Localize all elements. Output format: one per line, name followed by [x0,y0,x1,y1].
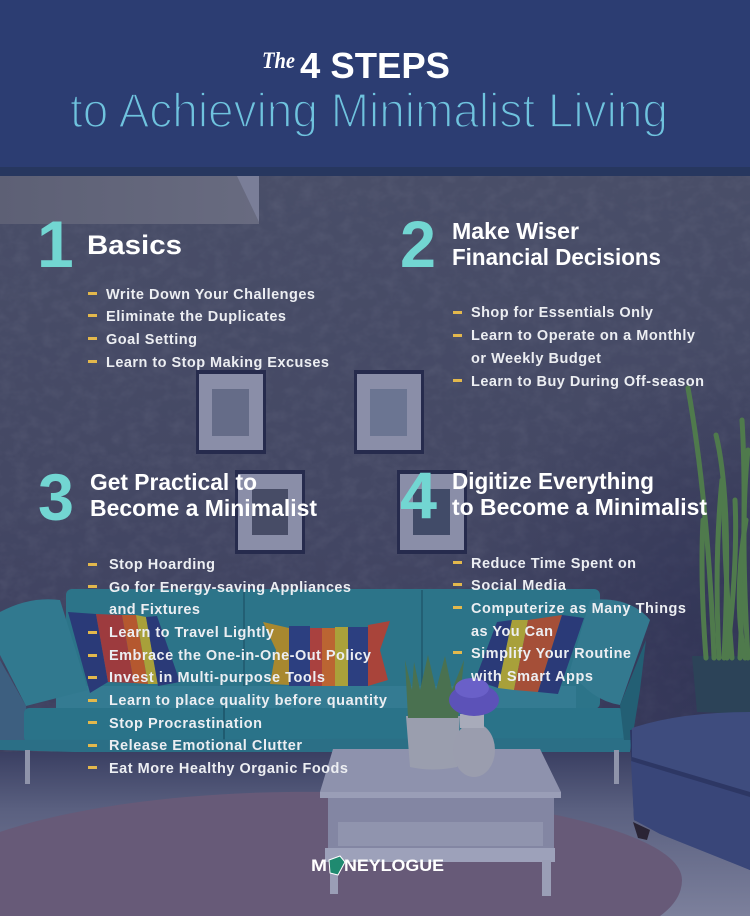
picture frames on the wall [196,370,467,554]
title: The [262,48,295,73]
section 2: Make Wiser Financial Decisions [400,207,704,390]
pillow: left striped [68,612,180,693]
title [70,45,668,138]
pillow: middle striped [263,621,390,686]
section 3: Get Practical to Become a Minimalist: Release Emotional Clutter [109,738,302,754]
section 1: Basics: Basics [87,230,182,260]
background: textured wall [0,176,750,796]
section 3: Get Practical to Become a Minimalist: Stop Procrastination [109,716,262,732]
coffee table [320,749,561,896]
sofa [0,589,650,784]
section 3: Get Practical to Become a Minimalist: Go for Energy-saving Appliances [109,580,351,596]
section 3: Get Practical to Become a Minimalist: 3 [38,460,74,534]
section 3: Get Practical to Become a Minimalist: Get Practical to [90,469,257,495]
floor and rug [0,752,750,916]
section 2: Make Wiser Financial Decisions: Shop for Essentials Only [471,305,653,321]
logo: MoneyLogue: NEYLOGUE [344,856,444,875]
section 3: Get Practical to Become a Minimalist: Eat More Healthy Organic Foods [109,761,348,777]
section 2: Make Wiser Financial Decisions: Financial Decisions [452,244,661,270]
section 4: Digitize Everything to Become a Minimalist: Social Media [471,578,567,594]
section 2: Make Wiser Financial Decisions: Make Wiser [452,218,579,244]
section 4: Digitize Everything to Become a Minimalist [400,458,707,685]
section 4: Digitize Everything to Become a Minimalist: with Smart Apps [470,669,593,685]
section 1: Basics: Goal Setting [106,332,197,348]
section 3: Get Practical to Become a Minimalist: Learn to Travel Lightly [109,625,274,641]
title: to Achieving Minimalist Living [70,85,668,138]
title: 4 STEPS [300,45,450,86]
section 2: Make Wiser Financial Decisions: Learn to Buy During Off-season [471,374,704,390]
section 3: Get Practical to Become a Minimalist: Stop Hoarding [109,557,215,573]
section 3: Get Practical to Become a Minimalist: Embrace the One-in-One-Out Policy [109,648,371,664]
section 4: Digitize Everything to Become a Minimalist: as You Can [471,624,553,640]
section 4: Digitize Everything to Become a Minimalist: Digitize Everything [452,468,654,494]
pillow: right striped [475,615,584,694]
section 1: Basics: Eliminate the Duplicates [106,309,286,325]
logo: MoneyLogue: M [311,856,327,875]
potted grass and flower vase [405,655,499,777]
chair: dark blue armchair [630,712,750,870]
section 1: Basics: 1 [37,207,74,281]
section 3: Get Practical to Become a Minimalist: and Fixtures [109,602,200,618]
section 2: Make Wiser Financial Decisions: or Weekly Budget [471,351,601,367]
section 4: Digitize Everything to Become a Minimalist: to Become a Minimalist [452,494,707,520]
header band [0,0,750,176]
section 1: Basics: Learn to Stop Making Excuses [106,355,329,371]
section 4: Digitize Everything to Become a Minimalist: 4 [400,458,437,532]
section 2: Make Wiser Financial Decisions: Learn to Operate on a Monthly [471,328,695,344]
section 3: Get Practical to Become a Minimalist: Become a Minimalist [90,495,317,521]
section 3: Get Practical to Become a Minimalist: Learn to place quality before quantity [109,693,387,709]
section 1: Basics: Write Down Your Challenges [106,287,315,303]
section 3: Get Practical to Become a Minimalist: Invest in Multi-purpose Tools [109,670,325,686]
section 2: Make Wiser Financial Decisions: 2 [400,207,436,281]
section 4: Digitize Everything to Become a Minimalist: Computerize as Many Things [471,601,686,617]
section 1: Basics [37,207,329,371]
section 3: Get Practical to Become a Minimalist [38,460,387,777]
section 4: Digitize Everything to Become a Minimalist: Reduce Time Spent on [471,556,636,572]
section 4: Digitize Everything to Become a Minimalist: Simplify Your Routine [471,646,631,662]
plant in pot [688,388,750,714]
